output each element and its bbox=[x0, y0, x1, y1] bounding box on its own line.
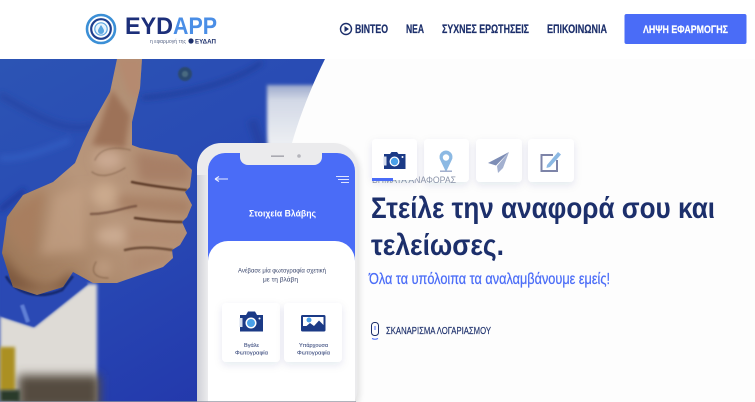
phone mockup bbox=[0, 143, 360, 402]
card: existing photo bbox=[284, 303, 342, 362]
back arrow bbox=[215, 176, 228, 182]
header bbox=[0, 0, 755, 59]
nav: video link bbox=[340, 24, 388, 36]
label: Φωτογραφία bbox=[297, 350, 331, 356]
logo wordmark: APP bbox=[173, 13, 217, 40]
download button bbox=[624, 14, 746, 44]
nav: video link: ΒΙΝΤΕΟ bbox=[355, 24, 388, 36]
icon: image bbox=[301, 315, 326, 332]
menu icon bbox=[336, 176, 349, 182]
phone screen bbox=[208, 153, 355, 402]
shirt button bbox=[178, 67, 192, 81]
logo tagline: η εφαρμογή της bbox=[150, 38, 186, 45]
logo tagline bbox=[150, 38, 216, 46]
phone notch bbox=[240, 153, 322, 165]
scan account link: ΣΚΑΝΑΡΙΣΜΑ ΛΟΓΑΡΙΑΣΜΟΥ bbox=[386, 326, 491, 337]
label: Βγάλε bbox=[244, 342, 260, 349]
cuff bbox=[0, 275, 88, 328]
label bbox=[297, 342, 331, 356]
step label: ΒΗΜΑΤΑ ΑΝΑΦΟΡΑΣ bbox=[372, 175, 456, 185]
logo wordmark bbox=[125, 13, 217, 40]
logo bbox=[87, 13, 217, 46]
main heading: Στείλε την αναφορά σου και bbox=[371, 192, 715, 225]
blurred background behind worker bbox=[0, 85, 317, 402]
phone instruction bbox=[238, 268, 326, 284]
tab: send bbox=[476, 139, 522, 182]
main heading bbox=[371, 192, 715, 262]
label: Φωτογραφία bbox=[235, 350, 269, 356]
main heading: τελείωσες. bbox=[371, 229, 504, 262]
logo tagline: ΕΥΔΑΠ bbox=[195, 38, 216, 46]
label bbox=[235, 342, 269, 356]
hand giving thumbs up bbox=[0, 59, 200, 299]
step tabs bbox=[372, 139, 574, 185]
thumb shading bbox=[92, 59, 142, 148]
icon: scan bbox=[372, 322, 378, 339]
finger creases bbox=[91, 148, 186, 278]
card: take photo bbox=[222, 303, 280, 362]
logo wordmark: EYD bbox=[125, 13, 173, 40]
finger and knuckle shading bbox=[0, 151, 190, 290]
phone instruction: με τη βλάβη bbox=[263, 276, 298, 284]
phone screen title: Στοιχεία Βλάβης bbox=[249, 208, 316, 220]
nav: faq: ΣΥΧΝΕΣ ΕΡΩΤΗΣΕΙΣ bbox=[442, 24, 529, 36]
icon: camera bbox=[240, 312, 263, 332]
shirt folds, pocket and button bbox=[0, 62, 262, 210]
white curved section edge bbox=[292, 59, 330, 143]
scan account link bbox=[372, 322, 491, 339]
subheading: Όλα τα υπόλοιπα τα αναλαμβάνουμε εμείς! bbox=[368, 271, 610, 288]
tab: camera active bbox=[372, 139, 417, 181]
logo mark bbox=[87, 15, 115, 43]
nav: contact: ΕΠΙΚΟΙΝΩΝΙΑ bbox=[547, 24, 607, 36]
nav: news: ΝΕΑ bbox=[406, 24, 424, 36]
phone instruction: Ανέβασε μία φωτογραφία σχετική bbox=[238, 268, 326, 274]
panel: hero photo bbox=[0, 59, 340, 402]
download button: ΛΗΨΗ ΕΦΑΡΜΟΓΗΣ bbox=[643, 24, 728, 36]
tab: edit bbox=[528, 139, 574, 182]
label: Υπάρχουσα bbox=[299, 342, 329, 349]
tab: location bbox=[424, 139, 469, 182]
